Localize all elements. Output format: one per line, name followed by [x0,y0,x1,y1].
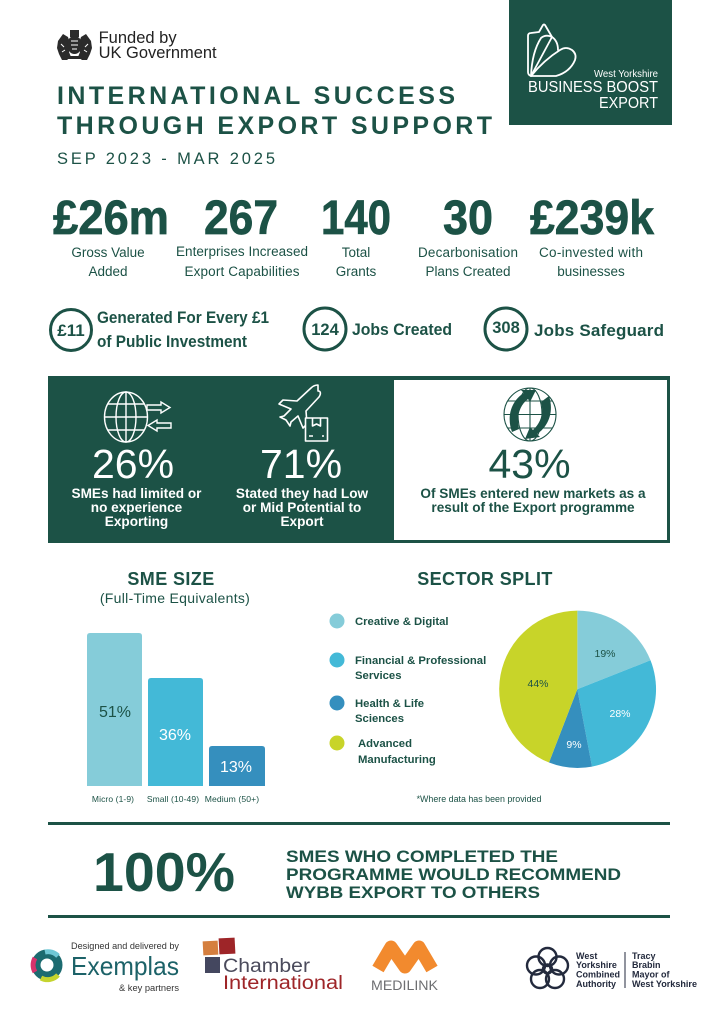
stat: 26%: 26% [92,441,174,487]
stat: co-invested: Co-invested with [539,245,643,260]
bar: small: Small (10-49) [147,794,199,804]
funded by UK Government logo [57,28,217,62]
stat: 26% [72,441,202,529]
callout: jobs created: 124 [311,321,340,339]
stat: grants: Grants [336,264,377,279]
stat: 71%: or Mid Potential to [243,500,361,515]
stat: decarbonisation: Plans Created [426,264,510,279]
funded by UK Government logo: Funded by [99,28,177,47]
footnote: *Where data has been provided [417,794,541,804]
logo: Medilink [371,947,439,993]
stat: 43% [420,441,646,515]
logo: Exemplas: Designed and delivered by [71,941,179,952]
legend: sectors: Financial & Professional [355,655,486,667]
legend: sectors [330,614,486,766]
heading: SME SIZE [127,569,215,589]
callout: £11 generated [50,309,269,351]
bar: micro: Micro (1-9) [92,794,134,804]
pie chart: sector split: 28% [609,708,631,720]
recommendation text [286,848,621,902]
logo: Chamber International [203,938,343,994]
icon: royal crest [57,30,92,60]
stat: co-invested [530,192,654,279]
stat: 71%: Export [280,514,324,529]
recommendation text: PROGRAMME WOULD RECOMMEND [286,866,621,884]
stat: 43%: Of SMEs entered new markets as a [420,486,646,501]
stat: decarbonisation: 30 [443,192,493,245]
stat: 26%: Exporting [105,514,168,529]
legend: sectors: Manufacturing [358,754,436,766]
logo: West Yorkshire Business Boost Export: EXPORT [599,95,658,112]
title: INTERNATIONAL SUCCESS [57,82,455,110]
stat: enterprises [176,192,308,279]
stat: 43%: result of the Export programme [431,500,635,515]
logo: West Yorkshire Combined Authority: West [576,951,597,961]
bar: small: 36% [159,727,191,744]
legend: sectors: Services [355,670,401,682]
callout: jobs created [304,308,452,350]
icon: petals [528,24,576,76]
title [57,82,492,140]
bar: medium: 13% [220,759,252,776]
logo: West Yorkshire Combined Authority [527,948,697,989]
stat: grants [321,192,391,279]
legend: sectors: Creative & Digital [355,616,449,628]
stat: gross value added: £26m [53,192,169,245]
icon: globe with curved arrows [504,388,556,441]
bar chart: SME size [87,569,265,804]
logo: West Yorkshire Combined Authority: Yorkshire [576,960,617,970]
bar: medium: Medium (50+) [205,794,259,804]
stat: 100%: 100% [93,841,235,903]
stat: decarbonisation [418,192,518,279]
logo: West Yorkshire Combined Authority: Authority [576,979,616,989]
legend: sectors: Sciences [355,713,404,725]
stat: enterprises: Export Capabilities [184,264,300,279]
logo: West Yorkshire Business Boost Export: BUSINESS BOOST [528,79,659,96]
pie chart: sector split: 44% [527,678,549,690]
pie chart: sector split [499,611,656,768]
stat: 43%: 43% [488,441,571,487]
stat: grants: Total [342,245,370,260]
stat: co-invested: businesses [557,264,625,279]
callout: jobs created: Jobs Created [352,320,452,339]
icon: plane and parcel [279,385,328,441]
logo: West Yorkshire Combined Authority: Tracy [632,951,656,961]
bar: micro: 51% [99,704,131,721]
legend: sectors: Health & Life [355,698,424,710]
title: THROUGH EXPORT SUPPORT [57,112,492,140]
stat: gross value added [53,192,169,279]
panel: export experience [48,376,670,543]
logo: West Yorkshire Combined Authority: Combined [576,970,620,980]
stat: 26%: no experience [91,500,183,515]
stat: decarbonisation: Decarbonisation [418,245,518,260]
logo: West Yorkshire Business Boost Export: West Yorkshire [594,68,658,80]
logo: West Yorkshire Combined Authority: West Yorkshire [632,979,697,989]
logo: West Yorkshire Combined Authority: Mayor of [632,970,671,980]
recommendation text: WYBB EXPORT TO OTHERS [286,884,540,902]
bar: medium [205,746,265,804]
stat: grants: 140 [321,192,391,245]
stat: gross value added: Gross Value [71,245,145,260]
legend: sectors: Advanced [358,738,412,750]
logo: Exemplas: & key partners [119,983,179,994]
stat: 71%: Stated they had Low [236,486,369,501]
callout: £11 generated: of Public Investment [97,333,247,351]
logo: Chamber International: International [223,973,343,994]
callout: jobs safeguard: Jobs Safeguard [534,321,664,340]
headline stats [53,192,654,279]
callout: £11 generated: Generated For Every £1 [97,309,269,327]
recommendation text: SMES WHO COMPLETED THE [286,848,558,866]
stat: 71% [236,441,369,529]
logo: West Yorkshire Business Boost Export [509,0,672,125]
logo: Exemplas: Exemplas [71,951,179,981]
pie chart: sector split: 19% [594,648,616,660]
bar: small [147,678,203,804]
funded by UK Government logo: UK Government [99,43,217,62]
logo: Exemplas [33,941,179,994]
divider band: recommendation [48,822,670,918]
callout: jobs safeguard: 308 [492,319,520,337]
logo: West Yorkshire Combined Authority: Brabin [632,960,661,970]
stat: 26%: SMEs had limited or [72,486,202,501]
stat: enterprises: 267 [204,192,278,245]
logo: Medilink: MEDILINK [371,977,439,993]
icon: globe with arrows [104,392,171,442]
stat: gross value added: Added [88,264,128,279]
date range: SEP 2023 - MAR 2025 [57,150,275,168]
stat: enterprises: Enterprises Increased [176,244,308,259]
bar: micro [87,633,142,804]
stat: co-invested: £239k [530,192,654,245]
logo: Chamber International: Chamber [223,956,311,977]
pie chart: sector split: 9% [566,739,582,751]
stat: 71%: 71% [260,441,342,487]
heading: sector split: SECTOR SPLIT [417,569,553,589]
callout: jobs safeguard [485,308,664,350]
callout: £11 generated: £11 [57,321,85,340]
subheading: (Full-Time Equivalents) [100,590,250,606]
